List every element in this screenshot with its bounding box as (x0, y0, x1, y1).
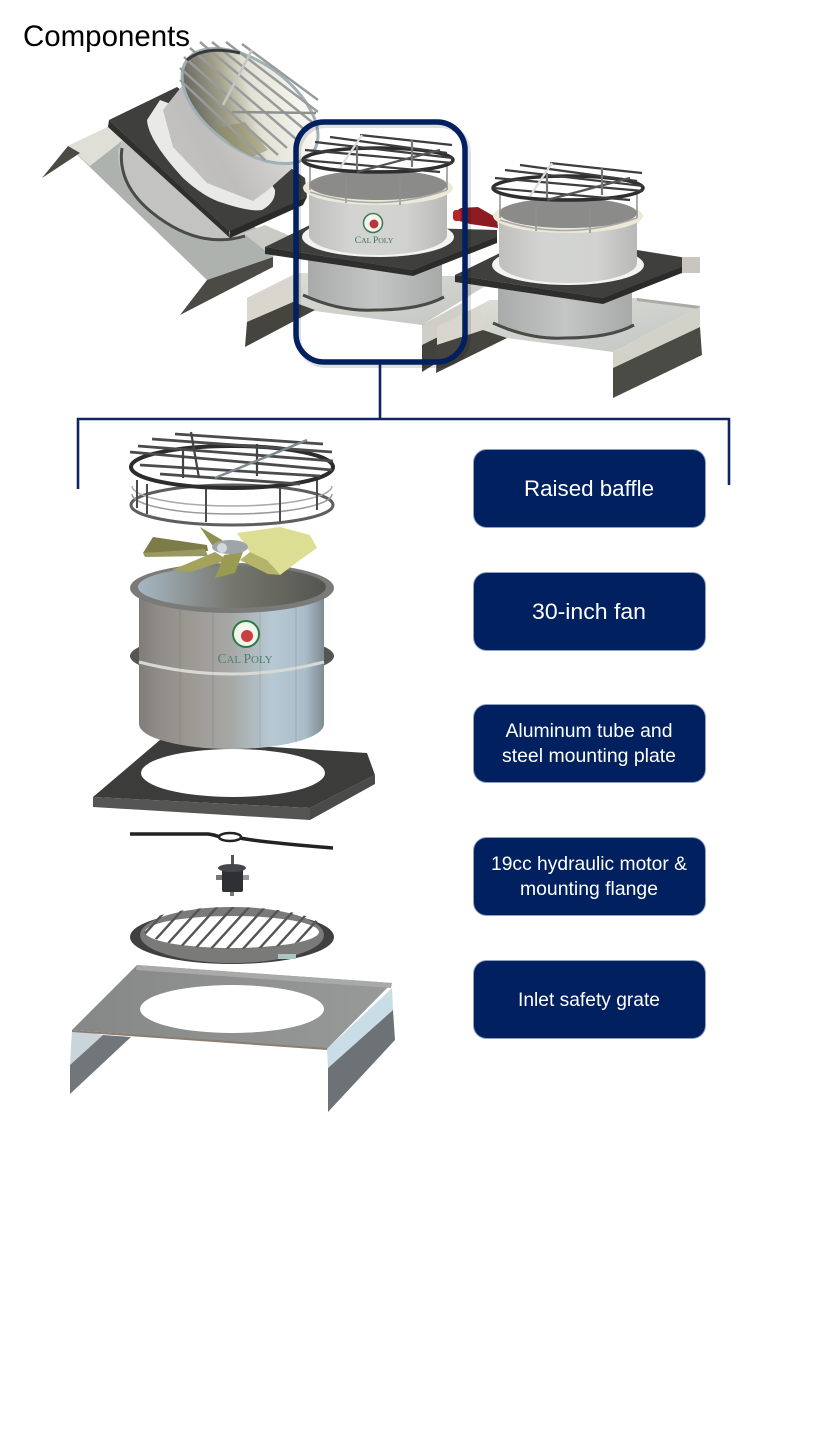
logo: CAL POLY (217, 651, 273, 666)
label: hydraulic motor and mounting flange (474, 838, 706, 916)
inlet safety grate (130, 906, 334, 964)
logo on middle fan (355, 214, 394, 246)
highlight box around middle fan (296, 122, 468, 365)
30-inch fan blades (143, 527, 317, 578)
title: Components (23, 20, 190, 53)
red hydraulic motor (453, 207, 498, 228)
middle fan unit (245, 135, 500, 372)
label: raised baffle: Raised baffle (524, 476, 654, 501)
exploded view of fan assembly (70, 432, 395, 1112)
tilted fan unit (42, 41, 320, 315)
panel: assembled three-fan machine (42, 25, 702, 398)
gasket / mounting flange (130, 833, 333, 848)
connector bracket (78, 364, 729, 489)
right fan unit (436, 163, 702, 398)
raised baffle grille (130, 432, 333, 525)
label: 30-inch fan: 30-inch fan (532, 599, 646, 624)
label: hydraulic motor and mounting flange: 19cc hydraulic motor & (491, 853, 687, 875)
mounting plate (93, 740, 375, 820)
base sheet (70, 965, 395, 1112)
hydraulic motor (216, 855, 249, 896)
label: aluminum tube and steel mounting plate: steel mounting plate (502, 745, 676, 767)
label: aluminum tube and steel mounting plate (474, 704, 706, 782)
aluminum tube (130, 563, 334, 749)
label: aluminum tube and steel mounting plate: Aluminum tube and (506, 720, 672, 742)
label: inlet safety grate (474, 960, 706, 1038)
label: 30-inch fan (474, 572, 706, 650)
logo (217, 621, 273, 666)
label: raised baffle (474, 450, 706, 528)
logo on middle fan: CAL POLY (355, 236, 394, 246)
label: hydraulic motor and mounting flange: mounting flange (520, 878, 658, 900)
label: inlet safety grate: Inlet safety grate (518, 989, 660, 1011)
